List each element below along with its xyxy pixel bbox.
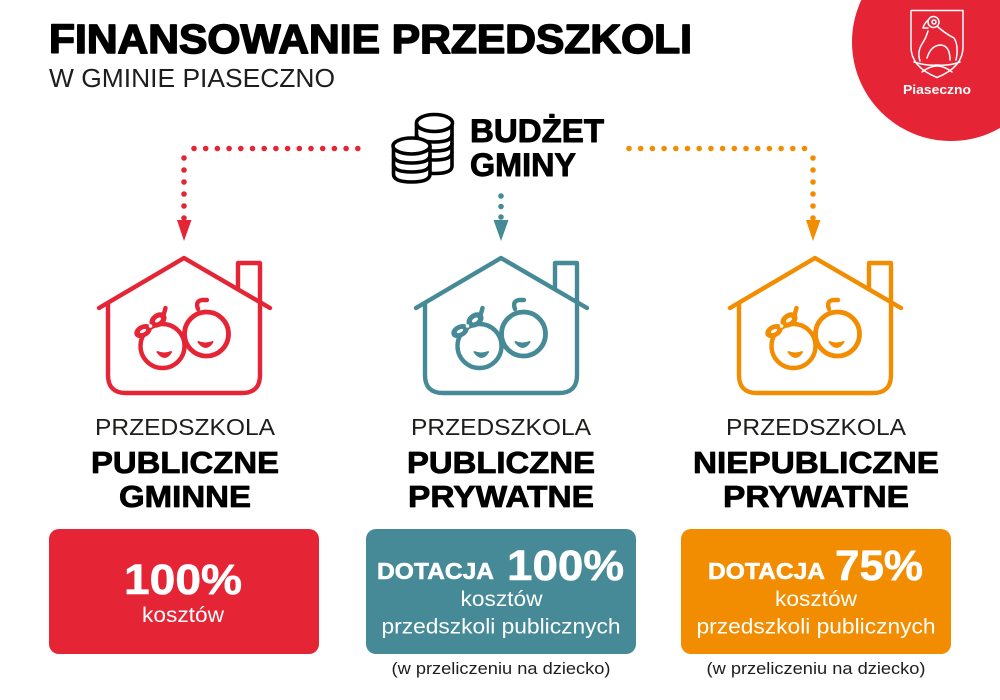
label: public municipal — [91, 414, 279, 514]
budget heading: BUDŻET — [470, 113, 604, 149]
label: non-public private: PRZEDSZKOLA — [726, 414, 907, 440]
subtitle: W GMINIE PIASECZNO — [49, 65, 335, 93]
icon: red house — [99, 258, 270, 393]
label: public municipal: PRZEDSZKOLA — [95, 414, 276, 440]
panel: teal funding — [366, 529, 636, 654]
arrow: to non-public private — [629, 148, 820, 241]
panel: red funding: kosztów — [142, 603, 224, 627]
panel: orange funding: przedszkoli publicznych — [696, 614, 936, 638]
label: public private: PUBLICZNE — [407, 445, 595, 480]
logo badge: Piaseczno — [852, 0, 1000, 141]
panel: orange funding: kosztów — [775, 587, 857, 611]
icon: teal house — [416, 258, 587, 393]
panel: orange funding: 75% — [835, 542, 923, 590]
label: public private: PRYWATNE — [408, 479, 594, 514]
panel: red funding: 100% — [124, 556, 242, 604]
panel: orange funding: DOTACJA — [708, 558, 825, 584]
arrow: to public private — [494, 196, 508, 241]
icon: orange house — [730, 258, 901, 393]
note: orange: (w przeliczeniu na dziecko) — [706, 659, 926, 678]
panel: orange funding — [681, 529, 951, 654]
icon: coins — [393, 114, 452, 182]
panel: teal funding: kosztów — [460, 587, 543, 611]
budget heading — [470, 113, 604, 183]
label: public private — [407, 414, 595, 514]
panel: red funding — [49, 529, 319, 654]
label: public municipal: PUBLICZNE — [91, 445, 279, 480]
budget heading: GMINY — [470, 147, 576, 183]
label: non-public private: PRYWATNE — [723, 479, 909, 514]
panel: teal funding: DOTACJA — [377, 558, 494, 584]
panel: teal funding: 100% — [507, 542, 624, 590]
label: public private: PRZEDSZKOLA — [411, 414, 592, 440]
panel: teal funding: przedszkoli publicznych — [382, 614, 620, 638]
title: FINANSOWANIE PRZEDSZKOLI — [49, 16, 692, 62]
label: non-public private: NIEPUBLICZNE — [693, 445, 939, 480]
arrow: to public municipal — [177, 148, 358, 241]
logo badge: Piaseczno: Piaseczno — [903, 82, 971, 97]
label: non-public private — [693, 414, 939, 514]
note: teal: (w przeliczeniu na dziecko) — [392, 659, 610, 678]
label: public municipal: GMINNE — [119, 479, 251, 514]
